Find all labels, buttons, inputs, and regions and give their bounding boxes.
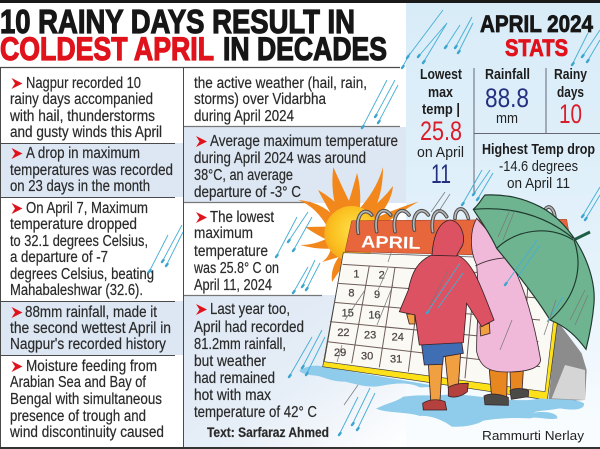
fact: rainy days [9,75,162,141]
illustration: sun, calendar, couple with umbrella [298,167,594,427]
fact: last year: April had recorded [194,319,304,336]
fact: April 7: degrees Celsius, beating [10,266,154,283]
panel: right column facts [184,75,406,447]
fact: last year: 81.2mm rainfall, [194,336,286,353]
title: COLDEST APRIL [0,31,214,67]
fact: lowest maximum temperature: was 25.8° C on [193,260,279,277]
calendar stand [548,320,587,402]
icon: sun [298,167,418,282]
fact: April 7 [10,200,154,299]
stats heading [480,11,594,62]
fact: 88mm rainfall [10,304,171,353]
title [0,3,387,67]
fact: moisture feeding: Arabian Sea and Bay of [10,374,147,391]
stat: rainy days: days [557,84,584,101]
stat: rainfall: Rainfall [485,66,530,83]
stats heading: STATS [505,35,568,62]
fact: average maximum temperature: Average maximum temperature [210,133,398,150]
fact: average maximum temperature: departure of -3° C [194,184,301,201]
fact: lowest maximum temperature: April 11, 2024 [194,277,272,294]
figure: red raincoat person [399,220,494,410]
calendar: 30 [361,350,373,362]
fact: drop in maximum temperatures [10,145,173,195]
calendar: 23 [364,329,376,341]
fact: 88mm rainfall: the second wettest April in [10,320,171,337]
fact: active weather continued: the active weather (hail, rain, [194,75,367,92]
stat: lowest max temp: 25.8 [420,116,462,146]
fact: rainy days: and gusty winds this April [10,124,162,141]
stat: rainfall: mm [496,110,518,127]
fact: average maximum temperature: during April 2024 was around [194,150,366,167]
fact: April 7: Mahabaleshwar (32.6). [10,282,143,299]
fact: April 7: On April 7, Maximum [26,200,148,217]
fact: active weather continued: storms) over Vidarbha [194,91,326,108]
stat: rainy days: Rainy [554,66,588,83]
calendar: 9 [374,289,380,301]
panel: left column facts [0,75,183,441]
fact: drop in maximum temperatures: temperatures was recorded [10,162,173,179]
stat: rainy days [554,66,588,129]
fact: April 7: to 32.1 degrees Celsius, [10,233,148,250]
calendar: 29 [334,347,346,359]
fact: average maximum temperature [194,133,398,201]
stat: lowest max temp: temp | [422,101,460,118]
fact: April 7: a departure of -7 [10,249,108,266]
fact: moisture feeding [9,358,164,441]
calendar: 24 [392,332,404,344]
fact: lowest maximum temperature: The lowest [210,209,275,226]
fact: average maximum temperature: 38°C, an average [194,167,293,184]
fact: 88mm rainfall: Nagpur's recorded history [10,336,166,353]
stats panel background [406,3,600,447]
fact: lowest maximum temperature: temperature [194,243,268,260]
fact: last year: Last year too, [210,301,290,318]
fact: moisture feeding: wind discontinuity caused [9,424,164,441]
fact: moisture feeding: Bengal with simultaneous [10,391,162,408]
calendar: 16 [368,309,381,321]
fact: active weather continued: during April 2024 [194,108,294,125]
icon: green umbrella [473,195,594,349]
fact: active weather continued [194,75,367,125]
stat: highest temp drop [482,141,595,192]
credit: text author: Text: Sarfaraz Ahmed [207,425,329,440]
calendar: 31 [390,353,402,365]
fact: moisture feeding: presence of trough and [10,408,146,425]
fact: last year: but weather [194,353,266,370]
calendar: APRIL [361,232,421,253]
fact: 88mm rainfall: 88mm rainfall, made it [25,304,158,321]
calendar: 1 [353,269,359,281]
fact: rainy days: rainy days accompanied [10,91,153,108]
title: 10 RAINY DAYS RESULT IN [0,3,355,40]
illustrator credit: Rammurti Nerlay [482,429,585,443]
figure: pink raincoat person [471,218,541,405]
puddle: right [376,394,584,427]
puddle: left [299,366,440,387]
fact: rainy days: Nagpur recorded 10 [26,75,141,92]
fact: April 7: temperature dropped [10,216,137,233]
stat: lowest max temp [417,66,464,189]
calendar: 15 [342,308,354,320]
fact: rainy days: with hail, thunderstorms [9,108,155,125]
rain streaks [149,10,600,435]
stat: rainfall: 88.8 [485,83,529,113]
fact: last year [194,301,317,421]
stat: rainy days: 10 [559,99,582,129]
fact: last year: hot with max [194,387,271,404]
fact: lowest maximum temperature: maximum [194,225,253,242]
title: IN DECADES [223,31,387,67]
fact: last year: temperature of 42° C [194,404,317,421]
fact: drop in maximum temperatures: on 23 days in the month [10,178,150,195]
panel: April 2024 stats [417,11,595,192]
calendar: 22 [337,327,350,339]
stat: highest temp drop: -14.6 degrees [499,158,578,175]
calendar: 2 [379,270,385,282]
stat: lowest max temp: max [428,84,454,101]
stat: rainfall [485,66,530,127]
fact: last year: had remained [194,370,275,387]
stat: lowest max temp: on April [417,144,464,161]
stat: lowest max temp: 11 [431,159,451,189]
stat: highest temp drop: on April 11 [507,175,570,192]
fact: moisture feeding: Moisture feeding from [26,358,157,375]
fact: lowest maximum temperature [193,209,279,294]
calendar [323,207,573,400]
fact: drop in maximum temperatures: A drop in maximum [26,145,140,162]
stat: lowest max temp: Lowest [420,66,462,83]
calendar: 8 [348,288,354,300]
